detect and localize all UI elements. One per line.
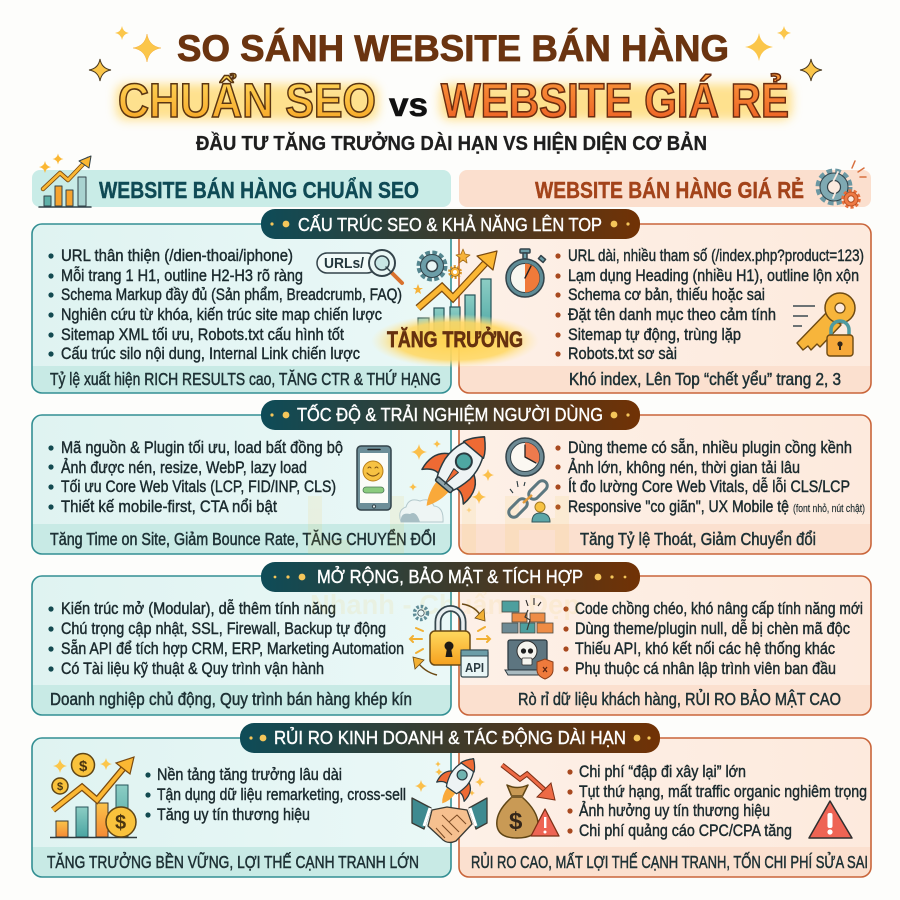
icon: finance growth chart (50, 754, 137, 838)
icon: broken chain and user (507, 479, 550, 522)
section pill (261, 209, 640, 239)
bullet list: Sitemap tự động, trùng lặp (568, 325, 741, 344)
outcome: Tăng Tỷ lệ Thoát, Giảm Chuyển đổi (580, 529, 816, 549)
bullet list: Có Tài liệu kỹ thuật & Quy trình vận hành (61, 659, 324, 678)
icon: key with padlock (793, 293, 855, 356)
icon: security lock with api: API (465, 660, 484, 675)
title: chuẩn seo: CHUẨN SEO (118, 74, 376, 128)
bullet list: Thiết kế mobile-first, CTA nổi bật (61, 497, 277, 516)
title block (116, 28, 792, 155)
chart: growth bars and arrow (418, 251, 497, 338)
icon: urls magnifier (317, 250, 402, 283)
column header: chuẩn seo: WEBSITE BÁN HÀNG CHUẨN SEO (99, 176, 419, 203)
title: vs: vs (389, 86, 428, 123)
icon: large warning (809, 801, 852, 838)
bullet list: (font nhỏ, nút chật) (793, 503, 865, 515)
column header: giá rẻ (459, 170, 871, 207)
title line 1: SO SÁNH WEBSITE BÁN HÀNG (177, 28, 729, 69)
icon: handshake (412, 798, 487, 842)
outcome: Tỷ lệ xuất hiện RICH RESULTS cao, TĂNG CTR & THỨ HẠNG (50, 368, 441, 389)
bullet list: Mã nguồn & Plugin tối ưu, load bất đồng bộ (61, 438, 343, 457)
outcome: Khó index, Lên Top “chết yểu” trang 2, 3 (569, 369, 841, 389)
bullet list: Sitemap XML tối ưu, Robots.txt cấu hình tốt (61, 325, 344, 344)
panel: scale right (459, 576, 871, 715)
bullet list: Phụ thuộc cá nhân lập trình viên ban đầu (575, 659, 836, 678)
icon: stopwatch (506, 249, 546, 297)
callout: tăng trưởng (371, 314, 539, 368)
panel: business risk left (32, 738, 451, 877)
bullet list (48, 438, 343, 516)
bullet list: Chi phí quảng cáo CPC/CPA tăng (579, 821, 792, 840)
bullet list: Dùng theme có sẵn, nhiều plugin cồng kềnh (568, 438, 852, 457)
section pill: CẤU TRÚC SEO & KHẢ NĂNG LÊN TOP (298, 214, 602, 235)
bullet list: Đặt tên danh mục theo cảm tính (568, 305, 776, 324)
bullet list: Ảnh lớn, không nén, thời gian tải lâu (568, 458, 800, 477)
icon: gears and stars (413, 249, 470, 294)
bullet list (567, 762, 867, 840)
outcome: Doanh nghiệp chủ động, Quy trình bán hàng khép kín (50, 689, 412, 709)
bullet list: Schema Markup đầy đủ (Sản phẩm, Breadcrumb, FAQ) (61, 285, 402, 304)
panel: seo structure left (32, 224, 451, 393)
title: website giá rẻ: WEBSITE GIÁ RẺ (441, 73, 789, 128)
bullet list: Kiến trúc mở (Modular), dễ thêm tính năng (61, 599, 336, 618)
panel: scale left (32, 576, 451, 715)
bullet list (145, 765, 406, 824)
column header: chuẩn seo (32, 170, 451, 207)
section 2 (32, 400, 871, 554)
icon: wall clock (506, 438, 544, 476)
icon: security lock with api (410, 604, 490, 677)
bullet list: URL thân thiện (/dien-thoai/iphone) (61, 246, 293, 265)
bullet list (48, 246, 402, 363)
watermark (308, 496, 580, 620)
bullet list: Chi phí “đập đi xây lại” lớn (579, 762, 746, 781)
icon: cracked bricks (502, 598, 553, 633)
icon: small rocket (415, 749, 488, 813)
callout: tăng trưởng: TĂNG TRƯỞNG (387, 327, 523, 352)
outcome: TĂNG TRƯỞNG BỀN VỮNG, LỢI THẾ CẠNH TRANH LỚN (47, 851, 419, 872)
section pill (261, 562, 640, 592)
section pill (261, 400, 640, 430)
section 3 (32, 562, 871, 715)
icon: header growth chart (39, 154, 91, 207)
bullet list: Dùng theme/plugin null, dễ bị chèn mã độc (575, 619, 850, 638)
bullet list: Ảnh hưởng uy tín thương hiệu (579, 801, 770, 820)
section pill: TỐC ĐỘ & TRẢI NGHIỆM NGƯỜI DÙNG (297, 404, 603, 425)
bullet list: Nền tảng tăng trưởng lâu dài (157, 765, 342, 784)
icon: hacked laptop (505, 640, 553, 679)
bullet list: Nghiên cứu từ khóa, kiến trúc site map chiến lược (61, 305, 382, 324)
section pill: RỦI RO KINH DOANH & TÁC ĐỘNG DÀI HẠN (274, 727, 626, 748)
icon: title sparkles (89, 26, 822, 81)
icon: header broken gears (818, 161, 866, 207)
outcome: Tăng Time on Site, Giảm Bounce Rate, TĂNG CHUYỂN ĐỔI (50, 528, 436, 549)
icon: falling arrow (502, 765, 555, 800)
bullet list: Tăng uy tín thương hiệu (157, 805, 310, 824)
panel: speed left (32, 415, 451, 554)
column header: giá rẻ: WEBSITE BÁN HÀNG GIÁ RẺ (535, 175, 804, 203)
bullet list (555, 246, 864, 363)
bullet list: Tối ưu Core Web Vitals (LCP, FID/INP, CLS) (61, 477, 336, 496)
bullet list: Ít đo lường Core Web Vitals, dễ lỗi CLS/LCP (568, 477, 850, 496)
panel: speed right (459, 415, 871, 554)
watermark: Nhanh - Chuẩn - Đẹp (310, 589, 580, 620)
section 4 (32, 723, 871, 877)
icon: finance growth chart: $ (79, 758, 88, 775)
bullet list (555, 438, 865, 516)
bullet list: Chú trọng cập nhật, SSL, Firewall, Backup tự động (61, 619, 386, 638)
section pill (240, 723, 660, 753)
section pill: MỞ RỘNG, BẢO MẬT & TÍCH HỢP (317, 566, 583, 587)
icon: money bag (497, 785, 538, 838)
icon: rocket with cloud (400, 419, 506, 524)
icon: finance growth chart: $ (115, 812, 126, 834)
bullet list: Ảnh được nén, resize, WebP, lazy load (61, 458, 307, 477)
bullet list: Cấu trúc silo nội dung, Internal Link chiến lược (61, 344, 360, 363)
bullet list (48, 599, 404, 678)
icon: finance growth chart: $ (57, 781, 63, 793)
subtitle: ĐẦU TƯ TĂNG TRƯỞNG DÀI HẠN VS HIỆN DIỆN CƠ BẢN (196, 131, 707, 155)
icon: urls magnifier: URLs/ (324, 255, 365, 272)
panel: business risk right (459, 738, 871, 877)
bullet list: Tận dụng dữ liệu remarketing, cross-sell (157, 785, 406, 804)
icon: money bag: $ (509, 808, 523, 835)
section 1 (32, 209, 871, 393)
panel: seo structure right (459, 224, 871, 393)
bullet list: Robots.txt sơ sài (568, 344, 677, 363)
bullet list: Schema cơ bản, thiếu hoặc sai (568, 285, 765, 304)
bullet list: Responsive "co giãn", UX Mobile tệ (568, 497, 789, 516)
outcome: Rò rỉ dữ liệu khách hàng, RỦI RO BẢO MẬT CAO (518, 688, 841, 709)
bullet list (563, 599, 863, 678)
icon: phone with smiley (357, 446, 391, 510)
title glow (116, 84, 792, 120)
bullet list: Thiếu API, khó kết nối các hệ thống khác (575, 639, 835, 658)
icon: small warning (531, 809, 559, 836)
bullet list: Sẵn API để tích hợp CRM, ERP, Marketing Automation (61, 639, 404, 658)
bullet list: Mỗi trang 1 H1, outline H2-H3 rõ ràng (61, 266, 303, 285)
